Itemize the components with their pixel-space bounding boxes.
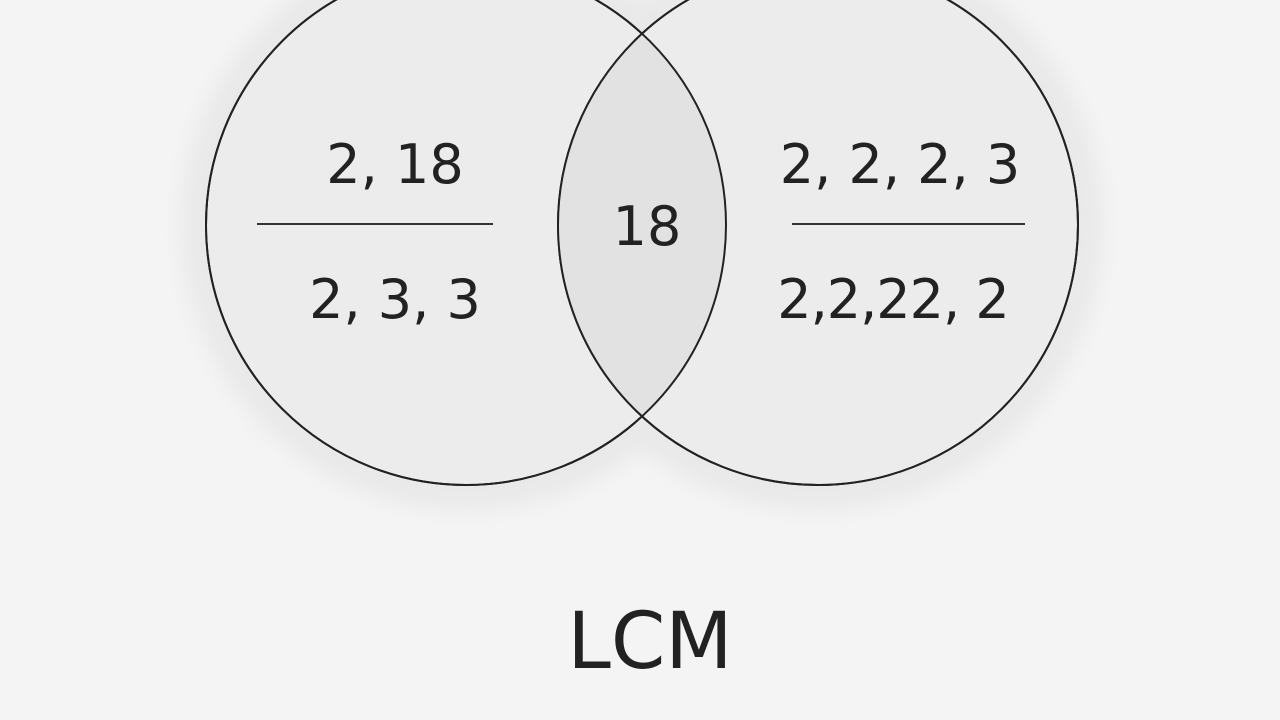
- left circle text: 2, 3, 3: [309, 268, 481, 331]
- intersection: [559, 35, 725, 415]
- left circle text: [257, 133, 493, 331]
- left circle text: 2, 18: [326, 133, 464, 196]
- intersection text: 18: [613, 195, 681, 258]
- title: LCM: LCM: [567, 597, 733, 687]
- right circle text: [777, 133, 1025, 331]
- venn diagram: [181, 0, 1103, 510]
- right circle: [558, 0, 1078, 485]
- right circle text: 2, 2, 2, 3: [780, 133, 1020, 196]
- right circle text: 2,2,22, 2: [777, 268, 1009, 331]
- left circle: [206, 0, 726, 485]
